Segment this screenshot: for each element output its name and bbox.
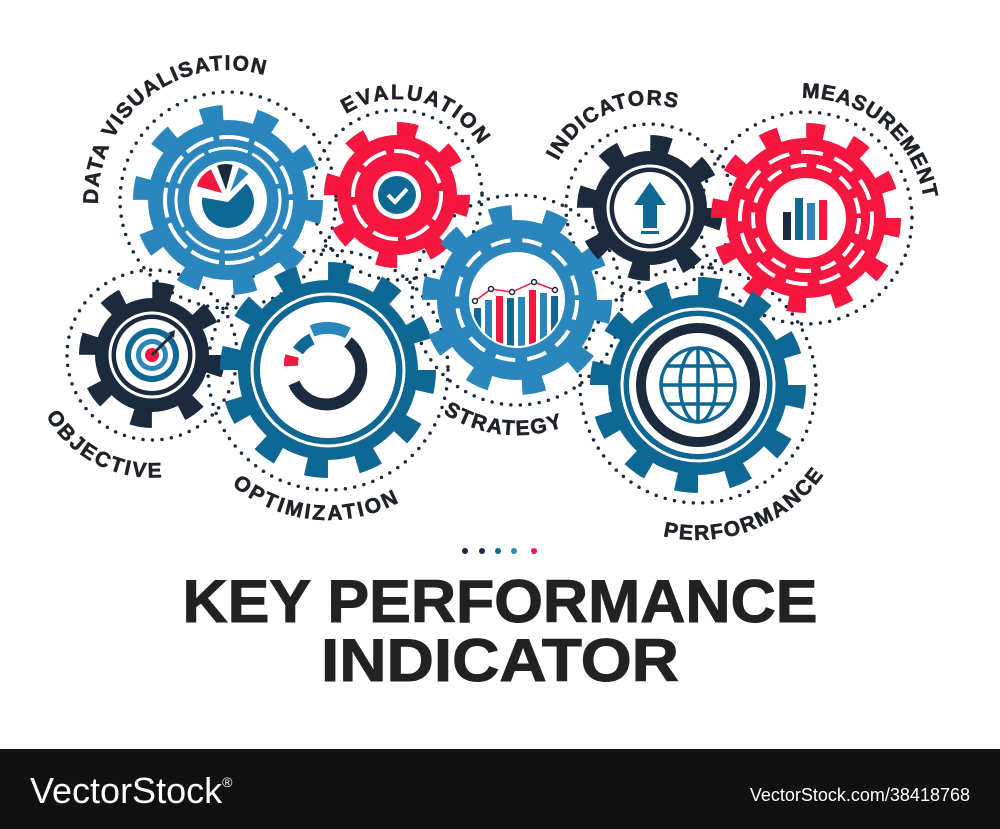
gear: objective	[88, 291, 216, 419]
labels: INDICATORS	[546, 90, 678, 160]
gear: measurement	[720, 132, 892, 304]
icon: check	[378, 176, 416, 214]
gear: performance	[600, 287, 796, 483]
labels: PERFORMANCE	[664, 466, 824, 540]
title: KEY PERFORMANCE	[182, 568, 818, 635]
icon: pie chart	[197, 164, 254, 228]
icon: target	[125, 328, 179, 382]
footer bar: ®	[222, 774, 233, 790]
labels: DATA VISUALISATION	[83, 55, 267, 203]
dotted orbit circles	[67, 92, 912, 503]
footer bar	[0, 749, 1000, 829]
labels: STRATEGY	[444, 402, 559, 436]
chart: bars and line	[472, 278, 558, 346]
gear: data visualisation	[142, 114, 314, 286]
gear: optimization	[230, 272, 426, 468]
labels: OPTIMIZATION	[234, 476, 398, 520]
labels: OBJECTIVE	[48, 410, 162, 478]
footer bar: VectorStock.com/38418768	[750, 785, 970, 805]
title: INDICATOR	[321, 627, 679, 694]
labels: EVALUATION	[340, 84, 491, 144]
labels	[48, 55, 938, 540]
gear: strategy	[430, 214, 604, 386]
gear: indicators	[586, 144, 714, 272]
icon: donut chart	[291, 328, 361, 404]
decorative dots	[462, 548, 537, 554]
icon: up arrow	[634, 182, 666, 234]
labels: MEASUREMENT	[802, 83, 938, 196]
gear: evaluation	[332, 130, 462, 260]
icon: bar chart	[783, 198, 827, 240]
footer bar: VectorStock	[30, 770, 222, 811]
icon: globe	[661, 348, 735, 422]
title	[182, 568, 818, 694]
